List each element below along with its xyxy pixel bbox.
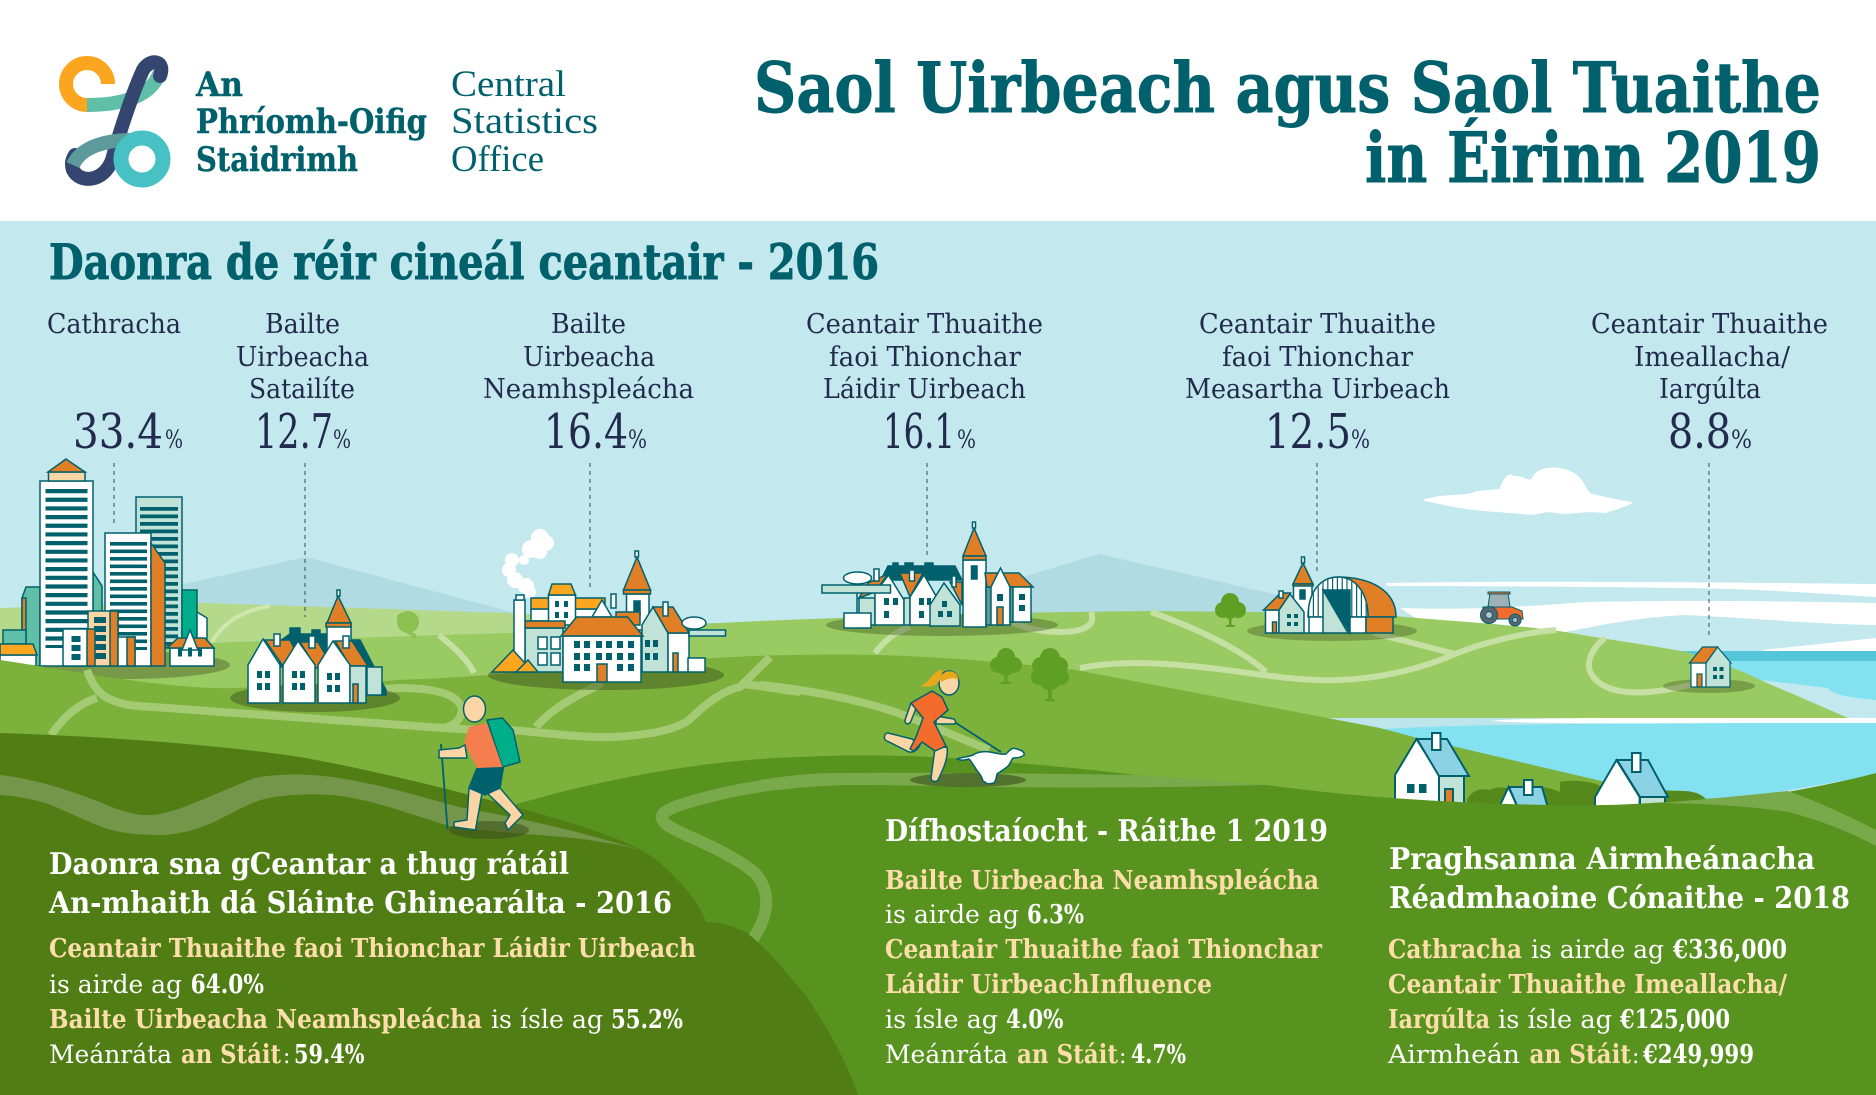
small tree: far left — [397, 611, 419, 638]
main building — [563, 636, 641, 682]
text block: health: Bailte Uirbeacha Neamhspleácha — [49, 1005, 482, 1035]
tree: near farm — [1215, 593, 1246, 627]
header band — [0, 0, 1876, 221]
logo text: English name — [451, 64, 598, 180]
icon: CSO logo — [66, 62, 163, 180]
text block: property prices: €336,000 — [1672, 935, 1787, 965]
ground shadow: independent town — [488, 660, 724, 690]
text block: health: Meánráta — [49, 1040, 172, 1070]
head — [464, 696, 486, 722]
mountains — [120, 554, 1300, 640]
text block: property prices: : — [1632, 1044, 1639, 1069]
label: remote rural — [1591, 309, 1828, 460]
spire — [1294, 584, 1312, 633]
smoke — [502, 529, 554, 598]
ground shadow: runner — [910, 773, 1026, 787]
text block: health — [48, 847, 696, 1070]
label: cities: % — [165, 425, 183, 454]
spire — [327, 623, 351, 651]
logo text: English name: Central — [451, 64, 566, 105]
text block: property prices: Praghsanna Airmheánacha — [1389, 842, 1815, 877]
front tower — [105, 533, 151, 666]
ground shadows back — [20, 651, 230, 679]
text block: health: An-mhaith dá Sláinte Ghinearálta - 2016 — [48, 886, 672, 921]
text block: health: is ísle ag — [491, 1005, 603, 1035]
label: rural strong urban influence: 16.1 — [883, 404, 955, 460]
text block: unemployment: Meánráta — [885, 1040, 1008, 1070]
windows: farm house — [1287, 614, 1298, 626]
house: front middle — [1496, 780, 1550, 815]
label: remote rural: Imeallacha/ — [1634, 342, 1791, 373]
label: rural moderate urban influence — [1185, 309, 1450, 460]
heading: population by area type: Daonra de réir cineál ceantair - 2016 — [49, 233, 879, 291]
yellow band block — [531, 609, 605, 621]
text block: unemployment: 4.0% — [1006, 1005, 1064, 1035]
body — [910, 691, 948, 751]
label: remote rural: % — [1731, 425, 1752, 454]
barn arch — [1337, 577, 1396, 617]
text block: health: 59.4% — [294, 1040, 365, 1070]
label: independent urban towns: 16.4 — [544, 404, 628, 460]
label: rural moderate urban influence: 12.5 — [1265, 404, 1351, 460]
dark roofs — [881, 563, 962, 580]
text block: property prices: €249,999 — [1642, 1040, 1754, 1070]
hair — [941, 671, 958, 682]
front leg — [931, 747, 947, 781]
text block: property prices: Iargúlta — [1388, 1005, 1490, 1035]
ground shadow: moderate urban influence — [1247, 621, 1417, 641]
text block: unemployment: 6.3% — [1027, 900, 1084, 930]
illustration: moderate urban town with barn — [1264, 557, 1396, 633]
text block: unemployment: is ísle ag — [885, 1005, 998, 1035]
label: independent urban towns — [483, 309, 694, 460]
horizon bands and sea — [1327, 582, 1876, 803]
mid hill — [0, 611, 1848, 718]
house — [1266, 610, 1279, 633]
logo text: Irish name — [195, 65, 427, 180]
title — [754, 48, 1821, 199]
petrol station — [844, 572, 872, 584]
label: rural strong urban influence: % — [957, 425, 976, 454]
text block: property prices: €125,000 — [1619, 1005, 1730, 1035]
text block: unemployment: Bailte Uirbeacha Neamhspleácha — [885, 866, 1319, 896]
label: rural strong urban influence: Láidir Uirbeach — [823, 374, 1026, 405]
label: independent urban towns: % — [628, 425, 647, 454]
text block: property prices: an Stáit — [1530, 1040, 1631, 1070]
dashed leader lines — [114, 463, 1709, 638]
illustration: satellite town houses — [248, 590, 386, 703]
label: rural strong urban influence: Ceantair Thuaithe — [806, 309, 1043, 340]
roads: front mid hill — [51, 657, 989, 750]
text block: property prices: Ceantair Thuaithe Imeallacha/ — [1388, 970, 1787, 1000]
label: rural moderate urban influence: Ceantair Thuaithe — [1199, 309, 1436, 340]
windows: satellite town — [257, 671, 340, 692]
logo text: Irish name: An — [195, 65, 243, 105]
white cloud — [1425, 468, 1631, 514]
label: rural moderate urban influence: faoi Thionchar — [1222, 342, 1413, 373]
back hill — [0, 603, 660, 680]
spire — [626, 594, 649, 630]
label: independent urban towns: Neamhspleácha — [483, 374, 694, 405]
text block: unemployment — [885, 814, 1328, 1070]
text block: unemployment: an Stáit — [1017, 1040, 1118, 1070]
label: rural moderate urban influence: % — [1351, 425, 1370, 454]
label: remote rural: Ceantair Thuaithe — [1591, 309, 1828, 340]
text block: property prices — [1387, 842, 1850, 1070]
text block: unemployment: Ceantair Thuaithe faoi Thionchar — [885, 935, 1322, 965]
text block: health: : — [283, 1044, 290, 1069]
torso — [464, 723, 502, 768]
left foreground hill — [0, 733, 858, 1095]
text block: property prices: is ísle ag — [1498, 1005, 1612, 1035]
sand piles — [492, 650, 533, 672]
label: independent urban towns: Bailte — [551, 309, 626, 340]
orange roofs — [859, 574, 888, 598]
left building — [525, 628, 563, 672]
ground shadow: remote — [1663, 679, 1755, 693]
back roofs — [280, 628, 386, 695]
house: front left — [1395, 733, 1469, 815]
illustration: strong urban influence town — [822, 522, 1033, 628]
logo text: English name: Office — [451, 139, 544, 180]
back tower — [136, 497, 182, 647]
legs — [454, 788, 482, 830]
label: satellite urban towns: Bailte — [265, 309, 340, 340]
right foreground hill — [510, 755, 1876, 1095]
panel: sky — [0, 221, 1876, 801]
text block: property prices: Cathracha — [1388, 935, 1522, 965]
leash — [956, 723, 1001, 752]
trees: centre — [990, 648, 1069, 702]
label: rural moderate urban influence: Measartha Uirbeach — [1185, 374, 1450, 405]
hiker — [439, 696, 523, 830]
text block: property prices: is airde ag — [1531, 935, 1664, 965]
petrol station — [682, 617, 706, 629]
illustration: independent town — [492, 551, 726, 682]
label: satellite urban towns: Uirbeacha — [236, 342, 369, 373]
right houses — [642, 607, 668, 672]
label: independent urban towns: Uirbeacha — [523, 342, 655, 373]
yellow-roofed tower — [548, 595, 576, 625]
roads: right foreground hill — [662, 773, 1876, 950]
text block: unemployment: Láidir UirbeachInfluence — [885, 970, 1212, 1000]
left mint — [859, 598, 875, 625]
logo text: Irish name: Phríomh-Oifig — [196, 102, 427, 142]
illustration: remote house — [1690, 647, 1731, 687]
logo text: English name: Statistics — [451, 101, 598, 142]
right group — [986, 587, 992, 625]
house: front right — [1595, 753, 1668, 815]
runner with dog — [884, 670, 1024, 784]
label: cities: 33.4 — [73, 404, 163, 460]
lake shore and front mid hill — [0, 655, 1706, 840]
windows: independent town — [555, 601, 658, 671]
pole — [441, 744, 448, 829]
text block: unemployment: : — [1119, 1044, 1126, 1069]
label: satellite urban towns — [236, 309, 369, 460]
label: cities — [47, 309, 183, 460]
rear leg — [884, 733, 920, 752]
text block: health: 64.0% — [191, 970, 264, 1000]
text block: unemployment: Dífhostaíocht - Ráithe 1 2019 — [885, 814, 1328, 849]
label: remote rural: Iargúlta — [1659, 374, 1761, 405]
label: satellite urban towns: % — [333, 425, 351, 454]
shorts — [469, 767, 504, 795]
text block: health: 55.2% — [611, 1005, 683, 1035]
text block: health: an Stáit — [181, 1040, 281, 1070]
gables — [248, 639, 280, 703]
green blocks — [182, 590, 197, 640]
ground shadow: satellite towns — [230, 684, 400, 712]
text block: health: is airde ag — [49, 970, 182, 1000]
tall tower — [40, 481, 93, 666]
label: cities: Cathracha — [47, 309, 181, 340]
windows: strong urban town — [884, 594, 1025, 618]
head — [939, 671, 959, 695]
text block: property prices: Airmheán — [1387, 1040, 1520, 1070]
label: rural strong urban influence: faoi Thionchar — [829, 342, 1021, 373]
text block: health: Daonra sna gCeantar a thug rátáil — [49, 847, 569, 882]
label: satellite urban towns: 12.7 — [255, 404, 333, 460]
label: satellite urban towns: Satailíte — [249, 374, 355, 405]
right roof — [335, 641, 368, 666]
small gable — [592, 600, 612, 617]
road: back hill — [212, 606, 270, 642]
arm — [439, 745, 467, 758]
label: remote rural: 8.8 — [1668, 404, 1731, 460]
bushes by lake — [1467, 781, 1706, 815]
front arm — [936, 716, 956, 724]
logo text: Irish name: Staidrimh — [196, 140, 358, 180]
road: left foreground hill — [0, 774, 640, 850]
low buildings — [88, 611, 118, 666]
text block: unemployment: is airde ag — [885, 900, 1019, 930]
dog — [957, 748, 1024, 784]
tractor — [1480, 592, 1523, 626]
tower — [963, 560, 986, 627]
roads: mid hill — [439, 612, 1690, 692]
rear arm — [905, 703, 917, 724]
ground shadow: hiker — [449, 821, 529, 839]
city: Cathracha — [0, 459, 214, 666]
backpack — [487, 718, 520, 767]
white gables — [875, 575, 904, 625]
ground shadow: strong urban influence — [826, 614, 1058, 636]
text block: health: Ceantair Thuaithe faoi Thionchar Láidir Uirbeach — [49, 934, 696, 964]
text block: unemployment: 4.7% — [1131, 1040, 1186, 1070]
label: rural strong urban influence — [806, 309, 1043, 460]
